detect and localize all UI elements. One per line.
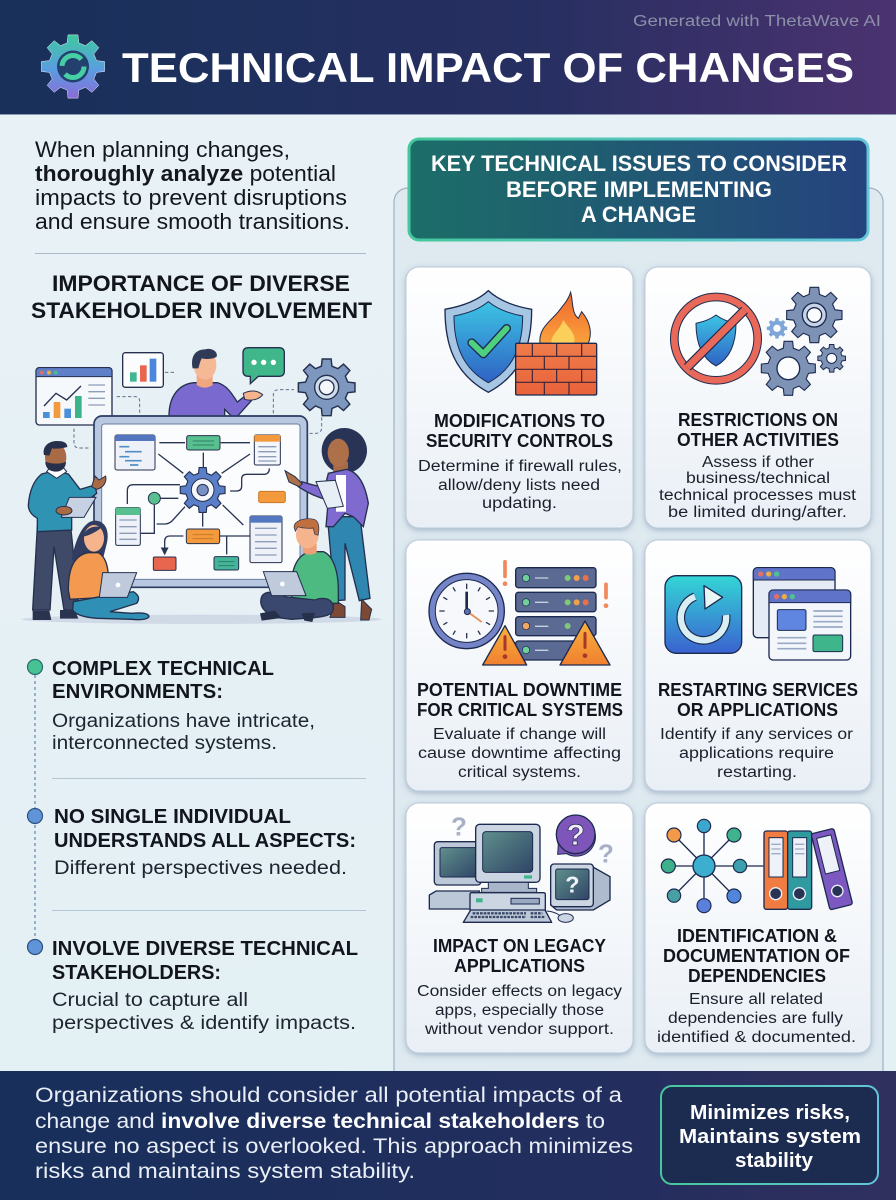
card text: DEPENDENCIES <box>688 966 826 986</box>
item: no single individual: Different perspectives needed. <box>54 858 347 879</box>
panel heading <box>409 139 868 240</box>
item: no single individual <box>28 805 356 879</box>
card text <box>418 411 622 512</box>
card text: SECURITY CONTROLS <box>426 431 613 451</box>
card: restarting <box>645 540 871 791</box>
watermark: Generated with ThetaWave AI <box>633 13 881 30</box>
card: security controls <box>406 267 633 528</box>
heading: stakeholder involvement <box>31 271 372 323</box>
callout: benefits: Minimizes risks, <box>690 1102 850 1124</box>
icon: shield and firewall <box>445 291 597 395</box>
card: downtime <box>406 540 633 791</box>
icon: clock, servers and warnings <box>429 562 610 665</box>
heading: stakeholder involvement: STAKEHOLDER INVOLVEMENT <box>31 298 372 323</box>
intro text <box>35 137 350 234</box>
card text: Assess if other <box>702 454 814 471</box>
card text: identified & documented. <box>657 1029 856 1046</box>
title: TECHNICAL IMPACT OF CHANGES <box>122 44 854 91</box>
card text <box>658 680 858 781</box>
card text: dependencies are fully <box>668 1010 843 1027</box>
item: involve diverse stakeholders <box>28 937 358 1034</box>
conclusion text: change and involve diverse technical stakeholders to <box>35 1110 605 1133</box>
header banner <box>0 0 896 115</box>
gear <box>298 359 355 416</box>
card text <box>417 936 622 1038</box>
callout: benefits: Maintains system <box>679 1126 861 1148</box>
card text: FOR CRITICAL SYSTEMS <box>417 700 623 720</box>
person: presenter top <box>169 349 263 419</box>
conclusion text: risks and maintains system stability. <box>35 1160 415 1183</box>
card text: applications require <box>679 745 834 762</box>
callout: benefits: stability <box>735 1150 814 1172</box>
card text: technical processes must <box>659 487 857 504</box>
intro text: When planning changes, <box>35 137 290 162</box>
panel heading: BEFORE IMPLEMENTING <box>506 177 772 202</box>
card text: apps, especially those <box>435 1002 604 1019</box>
card text: OR APPLICATIONS <box>677 700 838 720</box>
icon: legacy computers: ? <box>565 872 579 898</box>
intro text: and ensure smooth transitions. <box>35 209 350 234</box>
card text: Identify if any services or <box>660 726 853 743</box>
person: woman with notepad <box>285 428 372 620</box>
card: legacy applications <box>406 803 633 1053</box>
illustration: team around a system diagram <box>22 348 382 624</box>
speech bubble <box>243 348 284 384</box>
icon: prohibited shield and gears <box>674 287 845 395</box>
card text: critical systems. <box>458 764 581 781</box>
card: dependencies <box>645 803 871 1053</box>
item: complex environments: COMPLEX TECHNICAL <box>52 657 274 680</box>
conclusion text: ensure no aspect is overlooked. This approach minimizes <box>35 1135 633 1158</box>
item: involve diverse stakeholders: perspectives & identify impacts. <box>52 1013 356 1034</box>
card text: OTHER ACTIVITIES <box>677 430 839 450</box>
panel heading: A CHANGE <box>581 202 696 227</box>
item: involve diverse stakeholders: STAKEHOLDERS: <box>52 961 221 984</box>
card text: RESTARTING SERVICES <box>658 680 858 700</box>
heading: stakeholder involvement: IMPORTANCE OF DIVERSE <box>52 271 350 296</box>
icon: legacy computers: ? <box>598 838 614 868</box>
panel: key technical issues <box>394 139 883 1088</box>
card text: allow/deny lists need <box>438 477 600 494</box>
card text: DOCUMENTATION OF <box>663 946 850 966</box>
item: complex environments: interconnected systems. <box>52 733 277 754</box>
person: man with laptop <box>260 519 338 622</box>
item: complex environments: Organizations have intricate, <box>52 711 315 732</box>
card text <box>657 926 856 1046</box>
card text: IMPACT ON LEGACY <box>433 936 606 956</box>
item: involve diverse stakeholders: Crucial to capture all <box>52 990 248 1011</box>
icon: legacy computers <box>429 812 614 922</box>
card text: cause downtime affecting <box>418 745 621 762</box>
item: no single individual: NO SINGLE INDIVIDUAL <box>54 805 291 828</box>
item: involve diverse stakeholders: INVOLVE DIVERSE TECHNICAL <box>52 937 358 960</box>
card text: RESTRICTIONS ON <box>678 410 838 430</box>
whiteboard frame <box>94 416 307 587</box>
icon: gear logo <box>41 35 105 98</box>
bar chart card <box>123 353 163 387</box>
list: why diverse stakeholders matter <box>28 657 366 1034</box>
card text <box>417 680 623 781</box>
footer banner <box>0 1071 896 1200</box>
conclusion text <box>35 1084 633 1183</box>
item: complex environments <box>28 657 315 754</box>
person: woman with laptop <box>68 521 149 620</box>
icon: restart arrow and windows <box>665 568 851 660</box>
panel heading: KEY TECHNICAL ISSUES TO CONSIDER <box>431 151 847 176</box>
person: man with tablet <box>28 441 106 620</box>
card text: be limited during/after. <box>668 504 847 521</box>
item: no single individual: UNDERSTANDS ALL ASPECTS: <box>54 829 356 852</box>
item: complex environments: ENVIRONMENTS: <box>52 680 223 703</box>
conclusion text: Organizations should consider all potential impacts of a <box>35 1084 622 1107</box>
card text <box>659 410 857 521</box>
intro text: impacts to prevent disruptions <box>35 185 347 210</box>
chart window <box>36 368 112 425</box>
icon: legacy computers: ? <box>567 819 585 852</box>
card text: MODIFICATIONS TO <box>434 411 605 431</box>
card text: Evaluate if change will <box>433 726 606 743</box>
system diagram <box>115 435 285 570</box>
card text: POTENTIAL DOWNTIME <box>417 680 622 700</box>
intro text: thoroughly analyze potential <box>35 161 336 186</box>
card text: updating. <box>482 495 557 512</box>
card: restrictions <box>645 267 871 528</box>
card text: restarting. <box>717 764 797 781</box>
callout: benefits <box>661 1086 878 1184</box>
icon: legacy computers: ? <box>451 812 467 842</box>
card text: IDENTIFICATION & <box>677 926 837 946</box>
icon: network and binders <box>661 819 853 913</box>
card text: Determine if firewall rules, <box>418 458 622 475</box>
card text: APPLICATIONS <box>454 956 585 976</box>
card text: business/technical <box>686 470 830 487</box>
card text: Consider effects on legacy <box>417 983 622 1000</box>
card text: Ensure all related <box>689 991 823 1008</box>
card text: without vendor support. <box>424 1021 614 1038</box>
